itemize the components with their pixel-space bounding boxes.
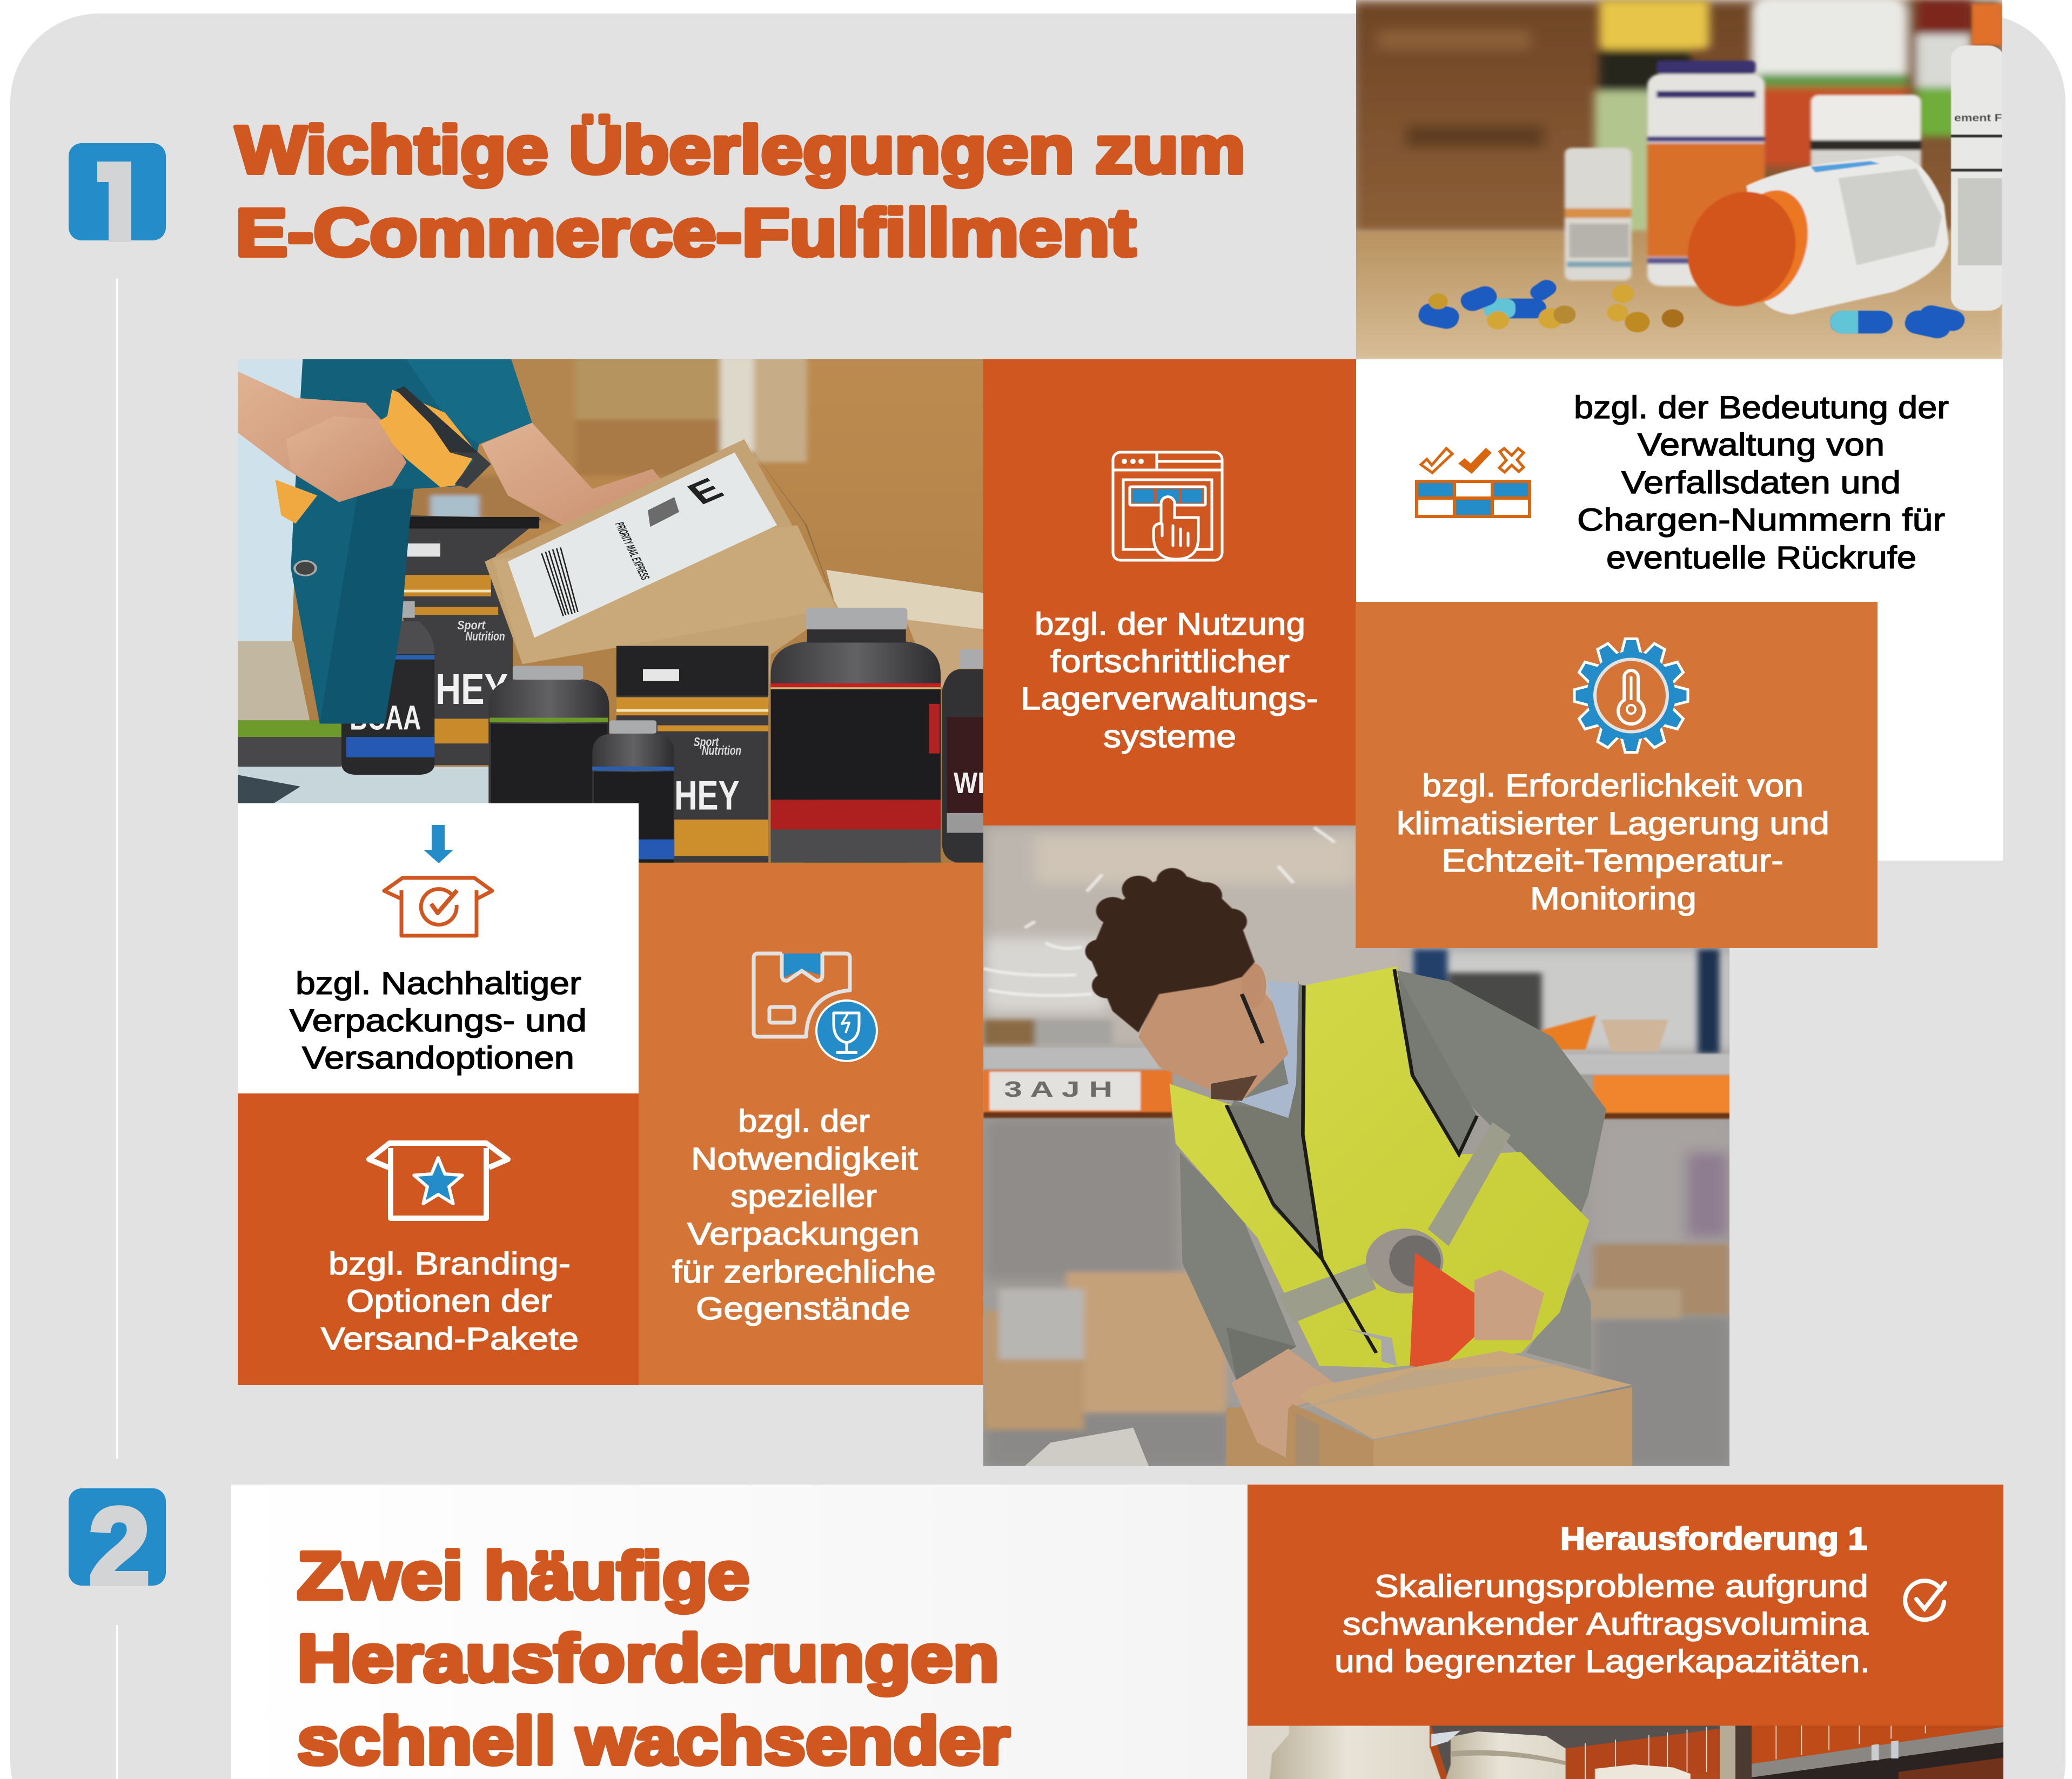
section 2 title: Zwei häufige bbox=[297, 1539, 749, 1613]
card text: Echtzeit-Temperatur- bbox=[1441, 843, 1783, 878]
panel: orange branding card bbox=[238, 1093, 639, 1385]
sub: parcel with shipping label: PRIORITY MAIL EXPRESS bbox=[612, 521, 652, 581]
card text bbox=[321, 1246, 579, 1357]
card text: fortschrittlicher bbox=[1050, 644, 1290, 679]
panel: challenge 1 bbox=[1248, 1485, 2003, 1726]
photo: white bottles in production hall bbox=[1243, 1718, 2006, 1779]
card text: Verwaltung von bbox=[1638, 427, 1885, 462]
sub: desk and laptop bbox=[238, 767, 493, 807]
sub: cardboard box bbox=[1226, 1351, 1632, 1468]
sub: parcel with shipping label bbox=[485, 439, 839, 707]
sub: large protein tub bbox=[771, 608, 941, 863]
sub: whey bag, back: Nutrition bbox=[465, 629, 505, 643]
card text bbox=[1021, 607, 1318, 754]
card text bbox=[672, 1104, 936, 1326]
sub: whey bag, back: HEY bbox=[435, 666, 508, 713]
sub: small right bottle: WI bbox=[954, 767, 984, 800]
panel: light orange fragile card bbox=[639, 863, 983, 1385]
number badge 2 bbox=[69, 1485, 166, 1610]
sub: arms bbox=[238, 372, 670, 527]
card text bbox=[290, 966, 587, 1076]
challenge text: und begrenzter Lagerkapazitäten. bbox=[1335, 1644, 1870, 1679]
challenge heading: Herausforderung 1 bbox=[1560, 1521, 1867, 1556]
sub: plastic wrap highlights bbox=[983, 828, 1335, 996]
card text: bzgl. der Nutzung bbox=[1035, 607, 1305, 642]
panel: white sustainable packaging card bbox=[238, 803, 639, 1093]
number badge 2: 2 bbox=[89, 1485, 150, 1610]
section 2 title bbox=[297, 1539, 1010, 1778]
section 2 title: Herausforderungen bbox=[297, 1621, 999, 1696]
card text: Chargen-Nummern für bbox=[1577, 502, 1945, 538]
sign text on shelf: 3 A J H bbox=[1004, 1077, 1112, 1102]
icon: browser window with hand bbox=[1113, 452, 1222, 560]
sub: head and hair bbox=[1085, 868, 1289, 1101]
sub: high-visibility vest bbox=[1169, 966, 1589, 1368]
card text: Verpackungs- und bbox=[290, 1003, 587, 1038]
card text: bzgl. Nachhaltiger bbox=[296, 966, 581, 1001]
sub: tape dispenser bbox=[1345, 1228, 1474, 1371]
sub: BCAA bottle bbox=[341, 601, 434, 775]
panel: white expiry-date card bbox=[1356, 359, 2003, 861]
sub: worker sweater bbox=[1180, 969, 1606, 1381]
icon: box with star bbox=[369, 1143, 508, 1218]
sub: small right bottle bbox=[942, 649, 987, 863]
card text: Verfallsdaten und bbox=[1621, 465, 1901, 500]
photo: scanning a parcel with supplements bbox=[238, 357, 990, 886]
sub: front jars and bag bbox=[488, 646, 768, 866]
sub: collar bbox=[1237, 981, 1299, 1118]
sub: parcel with shipping label: E bbox=[680, 471, 731, 511]
photo: supplement bottles and pills: ement F bbox=[1954, 111, 2002, 124]
panel: orange WMS card bbox=[983, 359, 1356, 825]
number badge 1: 1 bbox=[90, 141, 138, 266]
card text bbox=[1574, 390, 1949, 575]
sub: whey bag, back bbox=[397, 515, 542, 765]
section 1 title: E-Commerce-Fulfillment bbox=[236, 196, 1136, 270]
section 1 title bbox=[236, 113, 1245, 270]
icon: check circle bbox=[1905, 1581, 1945, 1620]
timeline line: section 1 bbox=[116, 279, 118, 1459]
card text: Verpackungen bbox=[687, 1217, 920, 1252]
sub: front jars and bag: HEY bbox=[674, 773, 740, 819]
icon: arrow down bbox=[424, 825, 453, 863]
card text bbox=[1397, 768, 1829, 916]
sub: whey bag, back: Sport bbox=[457, 619, 486, 633]
sub: front jars and bag: Sport bbox=[694, 735, 719, 749]
card text: Versand-Pakete bbox=[321, 1321, 579, 1357]
panel: section 2 heading card bbox=[231, 1485, 1248, 1779]
sub: BCAA bottle: BCAA bbox=[350, 699, 421, 737]
card text: systeme bbox=[1103, 719, 1236, 754]
section 1 title: Wichtige Überlegungen zum bbox=[236, 113, 1245, 187]
card text: Versandoptionen bbox=[302, 1040, 574, 1076]
card text: klimatisierter Lagerung und bbox=[1397, 806, 1829, 841]
sub: hands bbox=[1231, 1270, 1544, 1458]
challenge text: Skalierungsprobleme aufgrund bbox=[1374, 1569, 1868, 1604]
timeline line: section 2 bbox=[116, 1625, 118, 1779]
icon: gear with thermometer bbox=[1574, 639, 1688, 752]
sub: jar bottom-left bbox=[238, 720, 341, 771]
icon: box with check bbox=[384, 878, 492, 936]
icon: checks and table bbox=[1417, 448, 1530, 516]
panel: light orange climate card bbox=[1356, 602, 1877, 948]
sub: teal cardigan bbox=[291, 357, 532, 724]
card text: bzgl. Branding- bbox=[328, 1246, 571, 1281]
card text: spezieller bbox=[730, 1179, 877, 1214]
challenge text bbox=[1335, 1569, 1870, 1679]
photo: supplement bottles and pills bbox=[1351, 0, 2004, 360]
sub: barcode scanner bbox=[276, 386, 491, 523]
icon: fragile parcel bbox=[754, 954, 877, 1061]
section 2 title: schnell wachsender bbox=[297, 1704, 1010, 1778]
card text: Notwendigkeit bbox=[691, 1142, 918, 1177]
card text: Monitoring bbox=[1530, 881, 1697, 916]
number badge 1 bbox=[69, 143, 166, 242]
sub: front jars and bag: Nutrition bbox=[702, 744, 741, 758]
card text: Gegenstände bbox=[696, 1291, 910, 1326]
card text: bzgl. der Bedeutung der bbox=[1574, 390, 1949, 425]
card text: eventuelle Rückrufe bbox=[1606, 540, 1916, 575]
sub: white shirt and trousers bbox=[238, 357, 310, 722]
card text: für zerbrechliche bbox=[672, 1254, 936, 1290]
challenge text: schwankender Auftragsvolumina bbox=[1343, 1607, 1869, 1642]
card text: bzgl. der bbox=[738, 1104, 870, 1139]
card text: bzgl. Erforderlichkeit von bbox=[1422, 768, 1803, 803]
photo: warehouse worker taping a box bbox=[983, 810, 1733, 1468]
card text: Lagerverwaltungs- bbox=[1021, 681, 1318, 716]
card text: Optionen der bbox=[346, 1284, 552, 1319]
